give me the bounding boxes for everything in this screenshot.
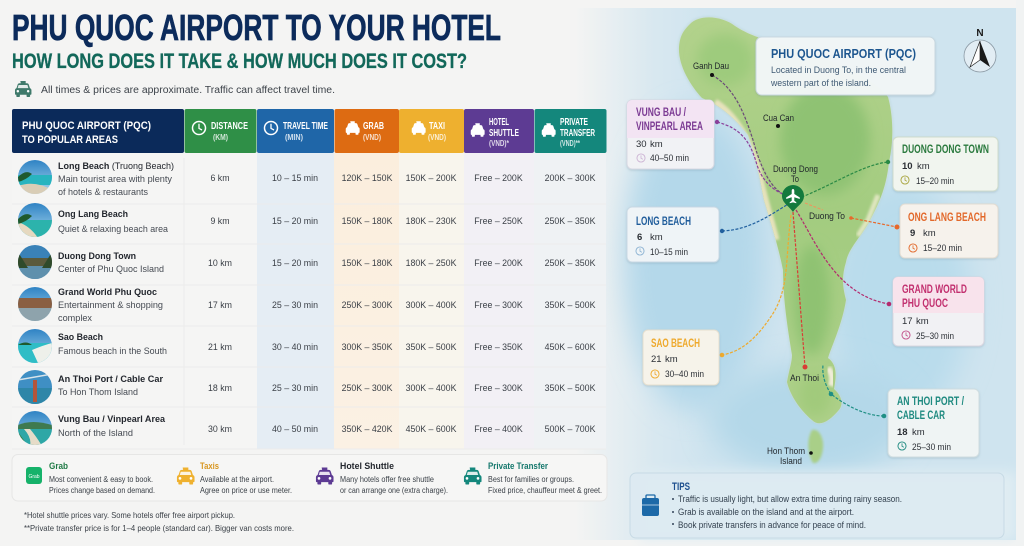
footnotes: **Private transfer price is for 1–4 people (standard car). Bigger van costs more. bbox=[24, 523, 294, 533]
callout: airport: western part of the island. bbox=[770, 78, 871, 88]
icon: airport pin bbox=[782, 185, 804, 212]
callout: Grand World bbox=[893, 277, 984, 346]
row: An Thoi Port: An Thoi Port / Cable Car bbox=[58, 374, 163, 385]
callout: Grand World: 17 bbox=[902, 316, 913, 327]
row: Long Beach: Long Beach (Truong Beach) bbox=[58, 161, 174, 172]
place labels: Cua Can bbox=[763, 113, 794, 123]
panel: transport legend bbox=[12, 454, 607, 501]
row: Sao Beach: 21 km bbox=[208, 342, 232, 352]
row: Vung Bau bbox=[18, 411, 596, 446]
row: Duong Dong Town: 10 km bbox=[208, 258, 232, 268]
row: Sao Beach: Famous beach in the South bbox=[58, 346, 167, 357]
footnotes bbox=[24, 510, 294, 533]
callout: Vung Bau: VINPEARL AREA bbox=[636, 119, 703, 133]
callout: Duong Dong Town: 15–20 min bbox=[916, 176, 954, 187]
row: Long Beach: 10 – 15 min bbox=[272, 173, 318, 183]
table header: (VND) bbox=[428, 133, 446, 142]
row: Grand World: 250K – 300K bbox=[342, 300, 393, 310]
row: Ong Lang Beach: 9 km bbox=[210, 216, 230, 226]
callout: Duong Dong Town bbox=[893, 137, 998, 191]
place labels bbox=[693, 61, 845, 466]
row: Long Beach: 6 km bbox=[210, 173, 230, 183]
icon: shuttle bbox=[316, 467, 334, 485]
row: Sao Beach: 300K – 350K bbox=[342, 342, 393, 352]
row: Grand World: Free – 300K bbox=[474, 300, 523, 310]
icon: suitcase bbox=[642, 495, 659, 516]
panel: tips: TIPS bbox=[672, 481, 690, 493]
row: Grand World: Entertainment & shopping bbox=[58, 300, 163, 311]
island: Phu Quoc bbox=[670, 10, 900, 463]
callout: Long Beach: 6 bbox=[637, 232, 642, 243]
row: Duong Dong Town bbox=[18, 245, 596, 280]
table header bbox=[12, 109, 606, 153]
row: Ong Lang Beach: Free – 250K bbox=[474, 216, 523, 226]
row: Ong Lang Beach bbox=[18, 203, 596, 238]
table header: (VND)** bbox=[560, 139, 581, 148]
routes bbox=[710, 73, 900, 455]
icon: taxi bbox=[177, 467, 195, 485]
panel: transport legend: or can arrange one (extra charge). bbox=[340, 486, 448, 495]
row: Sao Beach: Sao Beach bbox=[58, 332, 103, 343]
callout: Grand World: km bbox=[916, 316, 929, 327]
table header: HOTEL bbox=[489, 117, 509, 128]
table header: (MIN) bbox=[285, 133, 303, 142]
place labels: An Thoi bbox=[790, 373, 819, 383]
callout: Vung Bau: VUNG BAU / bbox=[636, 105, 686, 119]
row: Grand World: 17 km bbox=[208, 300, 232, 310]
row: Duong Dong Town: 250K – 350K bbox=[545, 258, 596, 268]
place labels: To bbox=[791, 174, 799, 184]
row: Grand World: complex bbox=[58, 313, 92, 324]
callout: Ong Lang Beach: ONG LANG BEACH bbox=[908, 210, 986, 224]
table header: DISTANCE bbox=[211, 121, 248, 132]
callout: Long Beach: km bbox=[650, 232, 663, 243]
row: Sao Beach: 450K – 600K bbox=[545, 342, 596, 352]
callout: airport bbox=[756, 37, 935, 95]
callout: airport: PHU QUOC AIRPORT (PQC) bbox=[771, 46, 916, 61]
callout: Long Beach: LONG BEACH bbox=[636, 214, 691, 228]
row: Vung Bau: 30 km bbox=[208, 424, 232, 434]
row: Duong Dong Town: Duong Dong Town bbox=[58, 251, 136, 262]
place labels: Duong Dong bbox=[773, 164, 818, 174]
row: Long Beach: 120K – 150K bbox=[342, 173, 393, 183]
row: Vung Bau: Free – 400K bbox=[474, 424, 523, 434]
callout: airport: Located in Duong To, in the central bbox=[771, 65, 906, 75]
row: Sao Beach: 30 – 40 min bbox=[272, 342, 318, 352]
title: PHU QUOC AIRPORT TO YOUR HOTEL bbox=[12, 7, 501, 48]
callout: Vung Bau: km bbox=[650, 139, 663, 150]
callout: Grand World: PHU QUOC bbox=[902, 296, 948, 310]
table header: (VND) bbox=[363, 133, 381, 142]
row: An Thoi Port: 350K – 500K bbox=[545, 383, 596, 393]
callout: An Thoi Port bbox=[888, 389, 979, 457]
place labels: Ganh Dau bbox=[693, 61, 729, 71]
callout: An Thoi Port: CABLE CAR bbox=[897, 408, 945, 422]
table header: TAXI bbox=[429, 121, 445, 132]
callout: Duong Dong Town: 10 bbox=[902, 161, 913, 172]
callout: An Thoi Port: km bbox=[912, 427, 925, 438]
comparison table bbox=[12, 109, 606, 449]
row: Vung Bau: North of the Island bbox=[58, 428, 133, 439]
row: Sao Beach: 350K – 500K bbox=[406, 342, 457, 352]
row: Long Beach: 150K – 200K bbox=[406, 173, 457, 183]
panel: tips: Traffic is usually light, but allow extra time during rainy season. bbox=[678, 494, 902, 504]
row: Long Beach: Free – 200K bbox=[474, 173, 523, 183]
row: Ong Lang Beach: Ong Lang Beach bbox=[58, 209, 128, 220]
panel: transport legend: Many hotels offer free shuttle bbox=[340, 475, 434, 484]
panel: transport legend: Best for families or groups. bbox=[488, 475, 574, 484]
row: Grand World: 350K – 500K bbox=[545, 300, 596, 310]
panel: tips bbox=[630, 473, 1004, 538]
row: Duong Dong Town: 15 – 20 min bbox=[272, 258, 318, 268]
row: Ong Lang Beach: 150K – 180K bbox=[342, 216, 393, 226]
callout: Vung Bau: 30 bbox=[636, 139, 647, 150]
icon: Grab: Grab bbox=[28, 474, 40, 480]
approximate note: All times & prices are approximate. Traffic can affect travel time. bbox=[41, 85, 335, 96]
table header: SHUTTLE bbox=[489, 128, 519, 139]
table header: (VND)* bbox=[489, 139, 510, 148]
panel: transport legend: Prices change based on demand. bbox=[49, 486, 155, 495]
icon: taxi note bbox=[15, 81, 31, 97]
row: Long Beach bbox=[18, 160, 596, 198]
row: Vung Bau: 350K – 420K bbox=[342, 424, 393, 434]
icon: Grab bbox=[26, 467, 42, 484]
table header: PRIVATE bbox=[560, 117, 588, 128]
row: Vung Bau: 40 – 50 min bbox=[272, 424, 318, 434]
panel: transport legend: Taxis bbox=[200, 461, 219, 472]
row: Grand World bbox=[18, 287, 596, 324]
row: An Thoi Port: To Hon Thom Island bbox=[58, 387, 138, 398]
table header: (KM) bbox=[213, 133, 228, 142]
callout: Vung Bau: 40–50 min bbox=[650, 153, 689, 164]
callout: Ong Lang Beach: 15–20 min bbox=[923, 243, 962, 254]
callout: Duong Dong Town: DUONG DONG TOWN bbox=[902, 142, 989, 156]
callout: An Thoi Port: 18 bbox=[897, 427, 908, 438]
panel: map bbox=[575, 0, 1024, 546]
callout: Sao Beach: 30–40 min bbox=[665, 369, 704, 380]
row: An Thoi Port: 250K – 300K bbox=[342, 383, 393, 393]
row: Duong Dong Town: 150K – 180K bbox=[342, 258, 393, 268]
place labels: Hon Thom bbox=[767, 446, 805, 456]
row: An Thoi Port: 25 – 30 min bbox=[272, 383, 318, 393]
place labels: Duong To bbox=[809, 211, 845, 221]
row: Long Beach: 200K – 300K bbox=[545, 173, 596, 183]
subtitle: HOW LONG DOES IT TAKE & HOW MUCH DOES IT COST? bbox=[12, 50, 467, 73]
row: Sao Beach bbox=[18, 329, 596, 363]
panel: transport legend: Agree on price or use meter. bbox=[200, 486, 292, 495]
row: Sao Beach: Free – 350K bbox=[474, 342, 523, 352]
row: Vung Bau: Vung Bau / Vinpearl Area bbox=[58, 414, 166, 425]
panel: transport legend: Private Transfer bbox=[488, 461, 548, 472]
callout: Ong Lang Beach bbox=[900, 204, 998, 258]
icon: private transfer bbox=[464, 467, 482, 485]
callout: Duong Dong Town: km bbox=[917, 161, 930, 172]
callout: Ong Lang Beach: 9 bbox=[910, 228, 915, 239]
table header: GRAB bbox=[363, 121, 384, 132]
row: Vung Bau: 450K – 600K bbox=[406, 424, 457, 434]
row: Duong Dong Town: 180K – 250K bbox=[406, 258, 457, 268]
row: Ong Lang Beach: 15 – 20 min bbox=[272, 216, 318, 226]
callout: Grand World: 25–30 min bbox=[916, 331, 954, 342]
panel: transport legend: Hotel Shuttle bbox=[340, 461, 394, 472]
callout: Ong Lang Beach: km bbox=[923, 228, 936, 239]
callout: Sao Beach: SAO BEACH bbox=[651, 336, 700, 350]
table header: TRAVEL TIME bbox=[283, 121, 328, 132]
callout: Sao Beach bbox=[643, 330, 719, 385]
place labels: Island bbox=[780, 456, 802, 466]
callout: An Thoi Port: 25–30 min bbox=[912, 442, 951, 453]
panel: tips: Grab is available on the island and at the airport. bbox=[678, 507, 854, 517]
row: Long Beach: Main tourist area with plenty bbox=[58, 174, 172, 185]
row: Grand World: 25 – 30 min bbox=[272, 300, 318, 310]
panel: tips: Book private transfers in advance for peace of mind. bbox=[678, 520, 866, 530]
table header: TO POPULAR AREAS bbox=[22, 134, 118, 146]
row: An Thoi Port bbox=[18, 370, 596, 404]
callout: An Thoi Port: AN THOI PORT / bbox=[897, 394, 964, 408]
callout: Grand World: GRAND WORLD bbox=[902, 282, 967, 296]
row: Duong Dong Town: Center of Phu Quoc Island bbox=[58, 264, 164, 275]
row: An Thoi Port: 300K – 400K bbox=[406, 383, 457, 393]
icon: compass: N bbox=[976, 28, 984, 39]
callout: Vung Bau bbox=[627, 100, 714, 169]
panel: transport legend: Fixed price, chauffeur meet & greet. bbox=[488, 486, 602, 495]
row: Grand World: 300K – 400K bbox=[406, 300, 457, 310]
panel: transport legend: Most convenient & easy to book. bbox=[49, 475, 153, 484]
row: Ong Lang Beach: 250K – 350K bbox=[545, 216, 596, 226]
icon: compass bbox=[964, 28, 996, 72]
row: Duong Dong Town: Free – 200K bbox=[474, 258, 523, 268]
row: An Thoi Port: Free – 300K bbox=[474, 383, 523, 393]
callout: Long Beach: 10–15 min bbox=[650, 247, 688, 258]
row: Ong Lang Beach: 180K – 230K bbox=[406, 216, 457, 226]
callout: Sao Beach: km bbox=[665, 354, 678, 365]
panel: transport legend: Available at the airport. bbox=[200, 475, 274, 484]
row: Vung Bau: 500K – 700K bbox=[545, 424, 596, 434]
callout: Sao Beach: 21 bbox=[651, 354, 662, 365]
table header: PHU QUOC AIRPORT (PQC) bbox=[22, 120, 151, 132]
row: An Thoi Port: 18 km bbox=[208, 383, 232, 393]
footnotes: *Hotel shuttle prices vary. Some hotels offer free airport pickup. bbox=[24, 510, 235, 520]
table header: TRANSFER bbox=[560, 128, 595, 139]
panel: transport legend: Grab bbox=[49, 461, 68, 472]
row: Ong Lang Beach: Quiet & relaxing beach area bbox=[58, 224, 169, 235]
row: Long Beach: of hotels & restaurants bbox=[58, 187, 148, 198]
callout: Long Beach bbox=[627, 207, 719, 262]
row: Grand World: Grand World Phu Quoc bbox=[58, 287, 157, 298]
